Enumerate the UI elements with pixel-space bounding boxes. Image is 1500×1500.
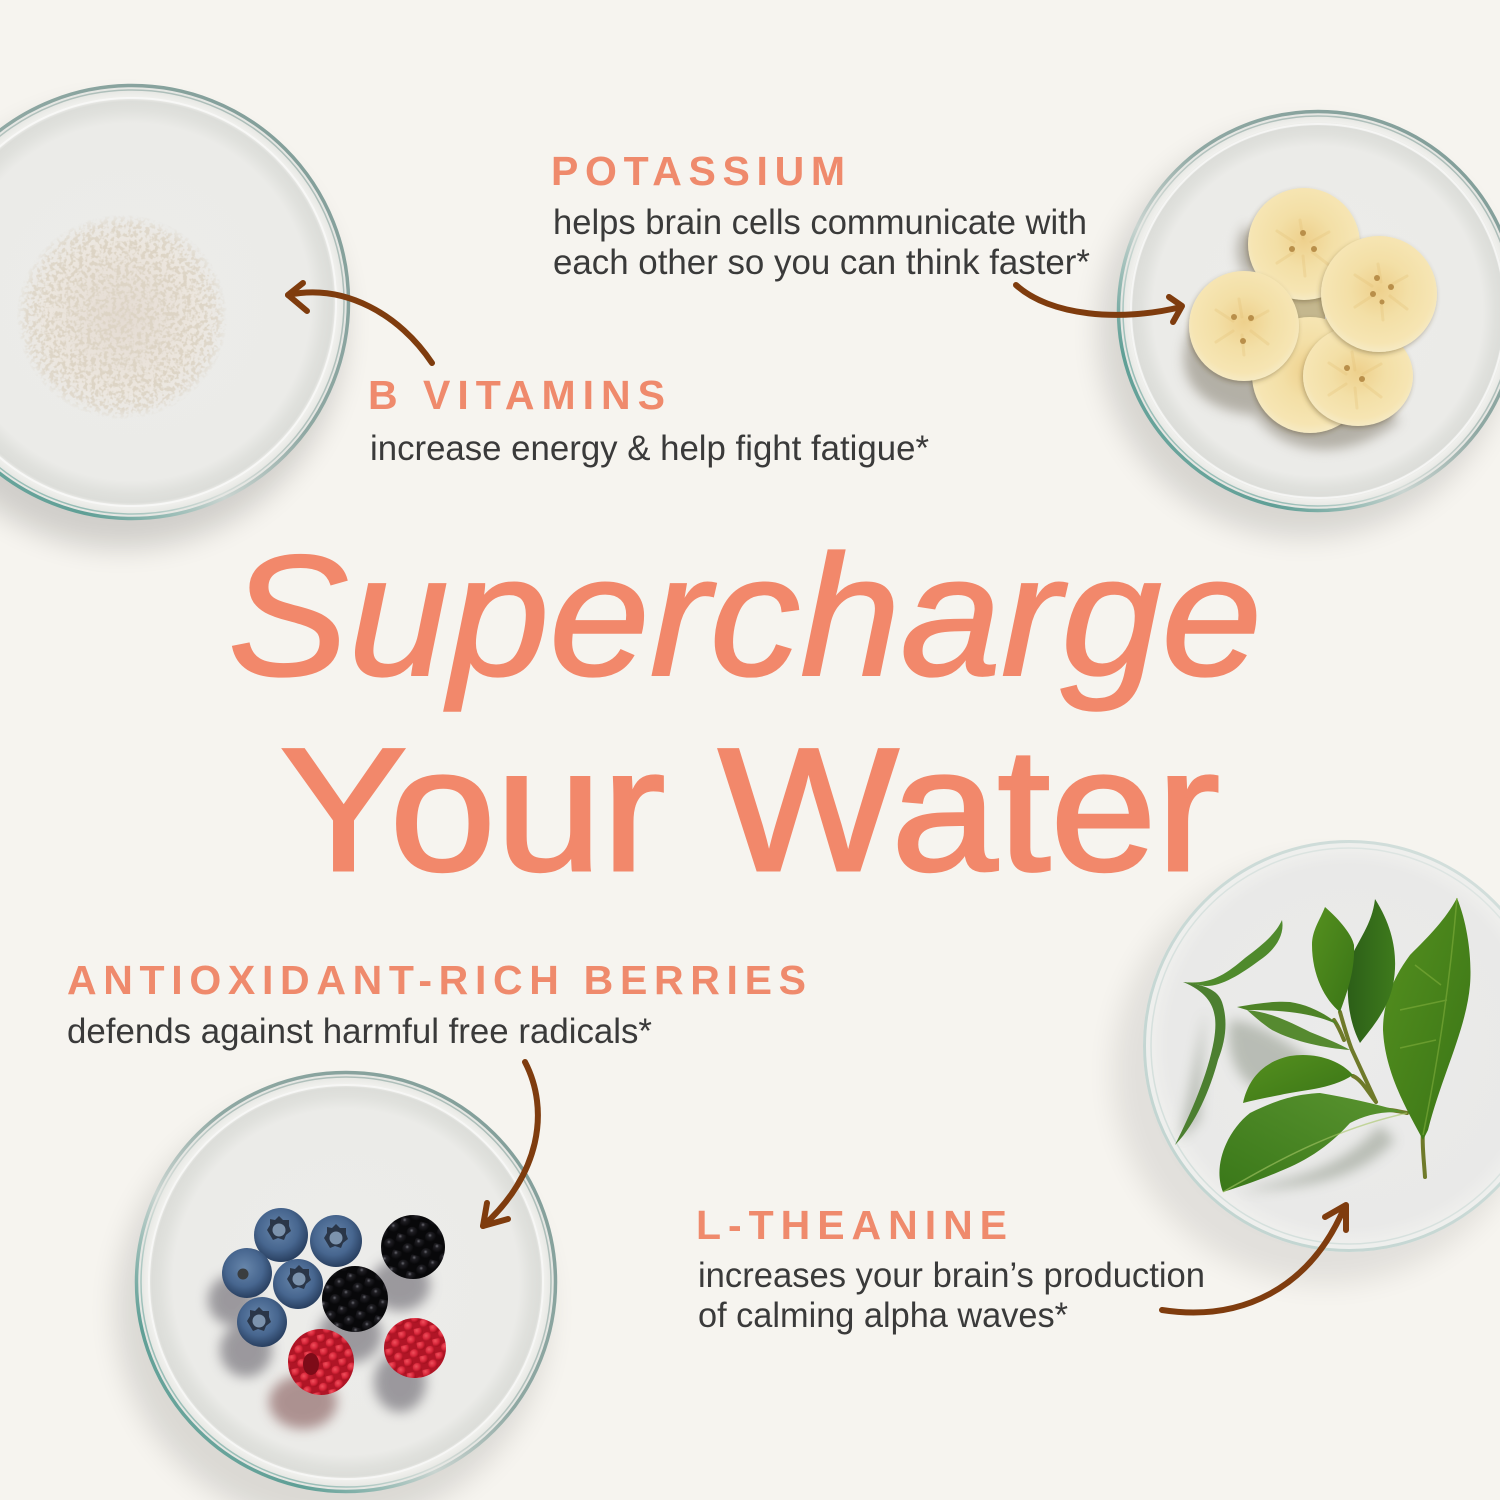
icon: banana slices [1189, 188, 1437, 433]
text block: L-theanine [696, 1202, 1205, 1335]
text block: potassium: POTASSIUM [551, 148, 845, 194]
title [228, 520, 1262, 908]
dish: L-theanine tea leaves [1113, 840, 1500, 1284]
icon: blackberries [322, 1215, 445, 1332]
text block: L-theanine: increases your brain’s production [698, 1256, 1205, 1295]
dish: antioxidant berries [116, 1071, 557, 1500]
text block: potassium: each other so you can think faster* [553, 243, 1090, 282]
title: Your Water [280, 713, 1220, 908]
text block: L-theanine: of calming alpha waves* [698, 1296, 1068, 1335]
arrow: L-theanine to leaves [1162, 1205, 1346, 1312]
text block: antioxidant-rich berries [67, 957, 806, 1051]
text block: antioxidant-rich berries: defends against harmful free radicals* [67, 1012, 652, 1051]
text block: potassium [551, 148, 1090, 282]
text block: antioxidant-rich berries: ANTIOXIDANT-RICH BERRIES [67, 957, 806, 1003]
title: Supercharge [228, 520, 1262, 712]
dish: potassium bananas [1099, 110, 1500, 537]
leaf shadows [1180, 1010, 1395, 1190]
text block: B vitamins [368, 372, 929, 468]
icon: powder pile [17, 215, 227, 419]
arrow: B vitamins to powder [288, 283, 432, 363]
text block: B vitamins: increase energy & help fight fatigue* [370, 429, 929, 468]
text block: potassium: helps brain cells communicate with [553, 203, 1087, 242]
arrow: berries text to berries dish [483, 1062, 538, 1226]
dish: B vitamins powder [0, 84, 350, 548]
berry shadows [208, 1259, 430, 1429]
banana shadow [1184, 225, 1400, 449]
icon: raspberries [288, 1318, 446, 1395]
arrow: potassium to bananas [1016, 285, 1182, 322]
icon: blueberries [222, 1208, 362, 1347]
icon: tea leaves [1175, 898, 1470, 1192]
text block: B vitamins: B VITAMINS [368, 372, 665, 418]
text block: L-theanine: L-THEANINE [696, 1202, 1007, 1248]
